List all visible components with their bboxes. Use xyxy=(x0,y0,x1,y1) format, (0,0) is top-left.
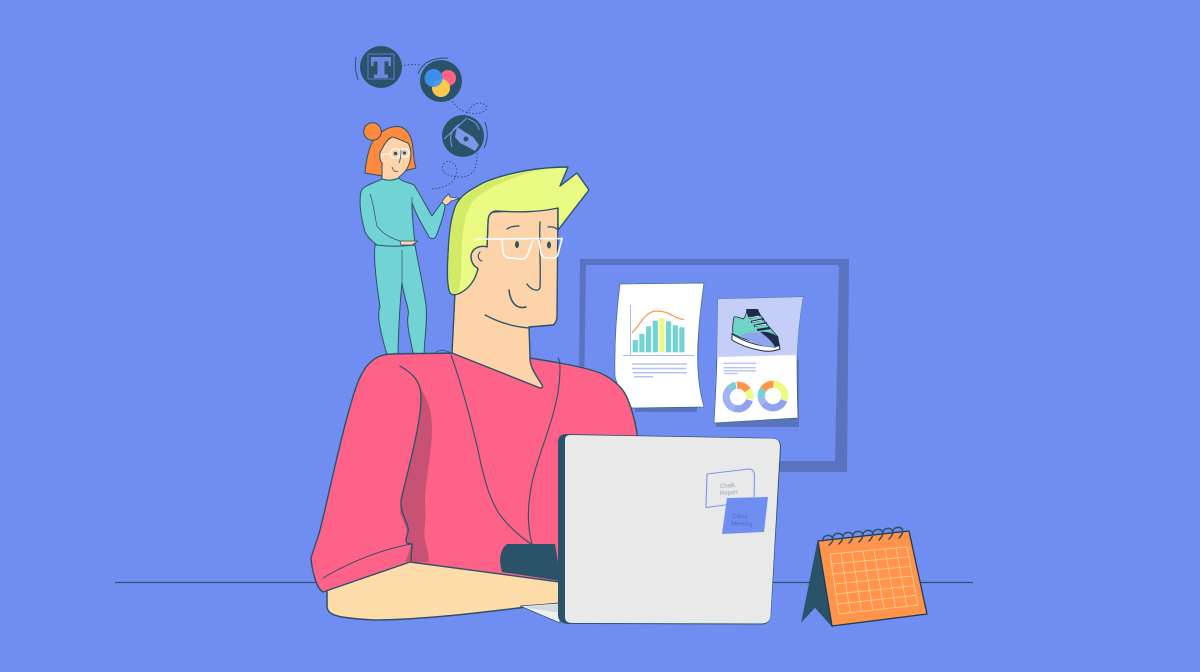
pink shirt xyxy=(311,353,640,592)
forearm xyxy=(327,560,560,620)
calendar grid xyxy=(830,547,918,614)
paper: shoe and donuts xyxy=(714,297,803,427)
sweater fold lines xyxy=(370,194,412,283)
laptop lid xyxy=(558,434,781,624)
laptop xyxy=(520,434,781,624)
icon: colour circles xyxy=(418,58,462,102)
caption lines xyxy=(724,363,756,374)
sticky note: report: Report xyxy=(720,490,738,497)
ear xyxy=(471,246,487,268)
ear outline xyxy=(471,246,487,268)
dotted path connectors xyxy=(388,64,487,189)
sticky note: meeting: Meeting xyxy=(731,521,753,528)
hair shadow xyxy=(448,170,540,293)
neck and face xyxy=(452,208,558,388)
desk line xyxy=(115,582,973,584)
paper: bar chart xyxy=(615,283,704,412)
trousers xyxy=(375,245,427,358)
face details xyxy=(478,222,557,328)
hand: open palm xyxy=(442,194,460,205)
sticky note: report: Chalk xyxy=(720,483,736,490)
donut chart left xyxy=(721,380,755,414)
calendar stand xyxy=(802,541,832,626)
sweater xyxy=(360,178,445,246)
icon: type tool xyxy=(355,46,402,88)
calendar spiral rings xyxy=(823,527,903,545)
sticky note: report xyxy=(706,469,754,508)
laptop lid face xyxy=(565,435,780,624)
hair bun xyxy=(364,123,381,140)
shirt fold lines xyxy=(323,350,560,578)
calendar page xyxy=(818,531,927,626)
hair back xyxy=(365,127,416,176)
dark sleeve xyxy=(500,544,561,581)
bar chart xyxy=(623,305,694,356)
hand: at waist xyxy=(400,241,418,245)
laptop base xyxy=(520,603,560,623)
hair xyxy=(447,167,589,295)
donut chart right xyxy=(756,379,790,413)
sticky note: meeting xyxy=(722,497,768,534)
man glasses xyxy=(474,238,562,259)
woman figure xyxy=(360,123,460,358)
man figure xyxy=(311,167,640,620)
woman glasses and eyes xyxy=(381,148,409,172)
neck and face xyxy=(380,137,411,180)
sleeve shadow xyxy=(400,387,432,562)
icon: sneaker xyxy=(732,309,780,351)
sticky note: meeting: Client xyxy=(732,514,748,521)
icon: pen tool xyxy=(442,115,487,157)
chart caption lines xyxy=(632,364,687,377)
desk calendar xyxy=(802,527,927,626)
pin board frame xyxy=(578,259,849,472)
